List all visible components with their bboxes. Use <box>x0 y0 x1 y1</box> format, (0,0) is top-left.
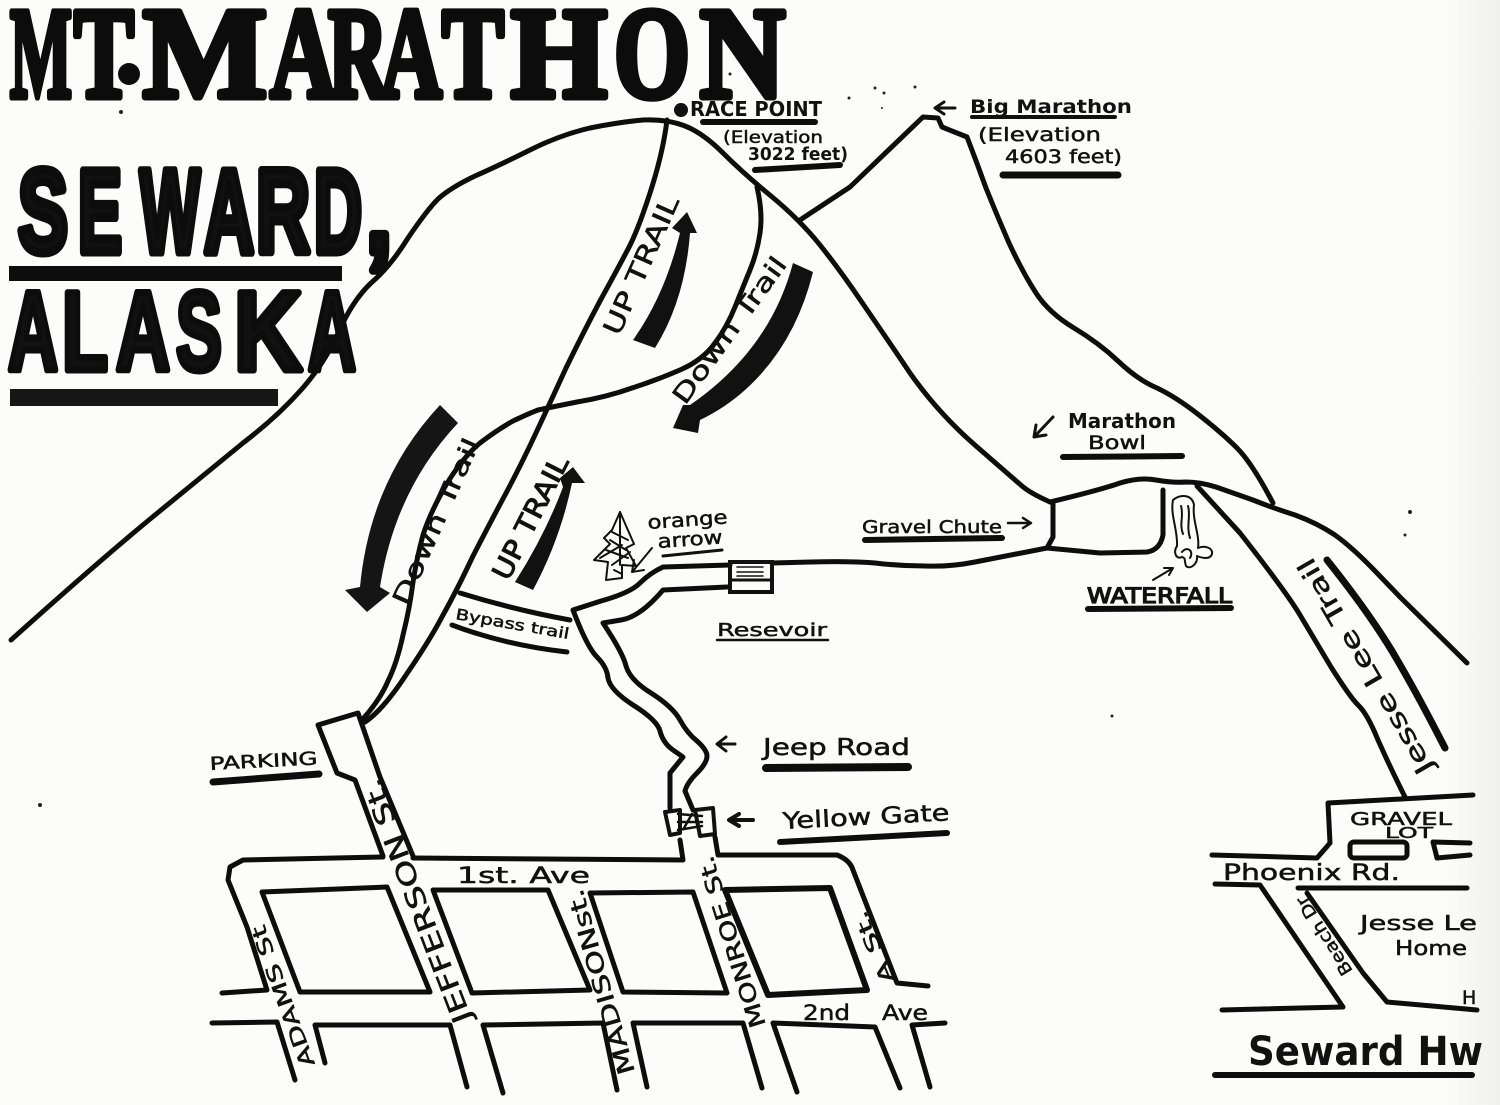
label: Adams St: ADAMS St <box>246 922 320 1070</box>
label: orange arrow: arrow <box>657 527 723 553</box>
heading: Alaska <box>8 269 356 406</box>
arrow: down trail upper <box>673 263 813 433</box>
label: Race Point: 3022 feet) <box>748 144 848 165</box>
arrow: down trail lower <box>345 405 458 612</box>
label: Reservoir: Resevoir <box>717 620 828 641</box>
Jesse Lee trail thick bar <box>1327 560 1445 748</box>
label: Marathon Bowl: Bowl <box>1088 432 1146 454</box>
label: orange arrow: orange <box>647 506 728 534</box>
label: gravel chute: Gravel Chute <box>862 517 1002 538</box>
label: Marathon Bowl: Marathon <box>1068 409 1176 433</box>
label: down trail lower: Down Trail <box>387 434 486 609</box>
label: Beach Dr: Beach Dr <box>1293 892 1357 979</box>
heading: Alaska: S <box>176 269 222 394</box>
label: Phoenix Rd: Phoenix Rd. <box>1223 861 1400 886</box>
label: Madison St: MADISONst. <box>563 886 641 1078</box>
arrow: to Big Marathon <box>935 102 955 114</box>
label: orange arrow <box>647 506 728 556</box>
label: Jesse Lee Home: Home <box>1395 936 1467 960</box>
bypass trail <box>452 593 571 652</box>
parking lot <box>318 713 413 856</box>
label: Gravel Lot: GRAVEL <box>1350 809 1452 830</box>
label: gravel chute <box>862 517 1031 540</box>
label: Big Marathon: 4603 feet) <box>1005 146 1122 168</box>
service road to reservoir <box>772 548 1047 566</box>
label: 2nd Ave: 2nd <box>803 1001 850 1025</box>
heading: Seward: W <box>140 146 200 278</box>
label: parking: PARKING <box>209 748 318 775</box>
heading: Alaska: A <box>116 269 170 394</box>
label: Yellow Gate <box>780 800 950 842</box>
label: waterfall: WATERFALL <box>1087 584 1232 608</box>
icon: waterfall <box>1172 496 1212 567</box>
arrow: to Marathon Bowl <box>1034 417 1053 437</box>
heading: Seward: , <box>366 146 392 278</box>
label: Hwy fragment: H <box>1462 987 1476 1009</box>
label: Gravel Lot: LOT <box>1385 824 1434 842</box>
label: Big Marathon <box>970 96 1132 175</box>
up trail line <box>365 120 667 722</box>
label: up trail upper: UP TRAIL <box>598 191 686 340</box>
label: Gravel Lot <box>1350 809 1452 842</box>
heading: Seward: A <box>204 146 254 278</box>
label: down trail upper: Down Trail <box>666 251 793 410</box>
heading: Seward: R <box>256 146 310 278</box>
heading: Alaska: K <box>234 269 302 394</box>
icon: tree with orange arrow <box>594 512 652 580</box>
label: Jesse Lee Trail: Jesse Lee Trail <box>1292 553 1441 782</box>
heading: Alaska: A <box>8 269 58 394</box>
label: 2nd Ave: Ave <box>882 1001 928 1025</box>
label: Big Marathon: Big Marathon <box>970 96 1132 118</box>
label: parking <box>209 748 319 782</box>
gravel chute connector <box>1047 490 1163 553</box>
heading: Seward: S <box>18 146 68 278</box>
label: Race Point: (Elevation <box>723 128 823 148</box>
label: Jeep Road: Jeep Road <box>760 735 910 761</box>
icon: yellow gate <box>665 808 715 836</box>
label: A St: A St. <box>849 907 900 987</box>
label: Race Point <box>674 97 848 170</box>
mountain main ridge <box>11 120 1050 640</box>
lower right ridge <box>1050 479 1467 663</box>
arrow: up trail upper <box>633 212 697 348</box>
label: up trail lower: UP TRAIL <box>487 451 576 585</box>
label: Monroe St: MONROE St. <box>694 852 772 1031</box>
Jesse Lee trail line <box>1197 486 1405 797</box>
heading: Seward: D <box>314 146 362 278</box>
label: Jesse Lee Home: Jesse Le <box>1357 911 1477 935</box>
Big Marathon ridge <box>800 117 1273 503</box>
bypass trail: Bypass trail <box>454 605 571 643</box>
label: Jefferson St: JEFFERSON St. <box>357 774 480 1030</box>
label: Jesse Lee Home <box>1357 911 1477 960</box>
label: Race Point: RACE POINT <box>690 97 822 121</box>
title: Mt. Marathon <box>10 0 785 126</box>
label: Yellow Gate: Yellow Gate <box>781 800 950 835</box>
down trail line <box>362 187 761 720</box>
arrow: up trail lower <box>515 467 585 590</box>
label: Big Marathon: (Elevation <box>978 124 1101 146</box>
arrow: to waterfall <box>1153 568 1173 580</box>
label: 2nd Ave <box>803 1001 928 1025</box>
heading: Alaska: L <box>62 269 108 394</box>
gravel lot block <box>1212 795 1477 1010</box>
heading: Seward: E <box>78 146 122 278</box>
jeep road <box>573 565 730 810</box>
label: Reservoir <box>717 620 828 641</box>
street grid <box>212 837 945 1093</box>
reservoir box <box>730 562 772 592</box>
arrow: to Jeep Road <box>717 737 735 751</box>
label: Seward Hwy: Seward Hw <box>1248 1029 1483 1075</box>
heading: Alaska: A <box>308 269 356 394</box>
heading: Seward <box>9 146 392 281</box>
label: Marathon Bowl <box>1063 409 1182 457</box>
label: 1st Ave: 1st. Ave <box>457 864 590 889</box>
arrow: to Yellow Gate <box>729 814 753 826</box>
